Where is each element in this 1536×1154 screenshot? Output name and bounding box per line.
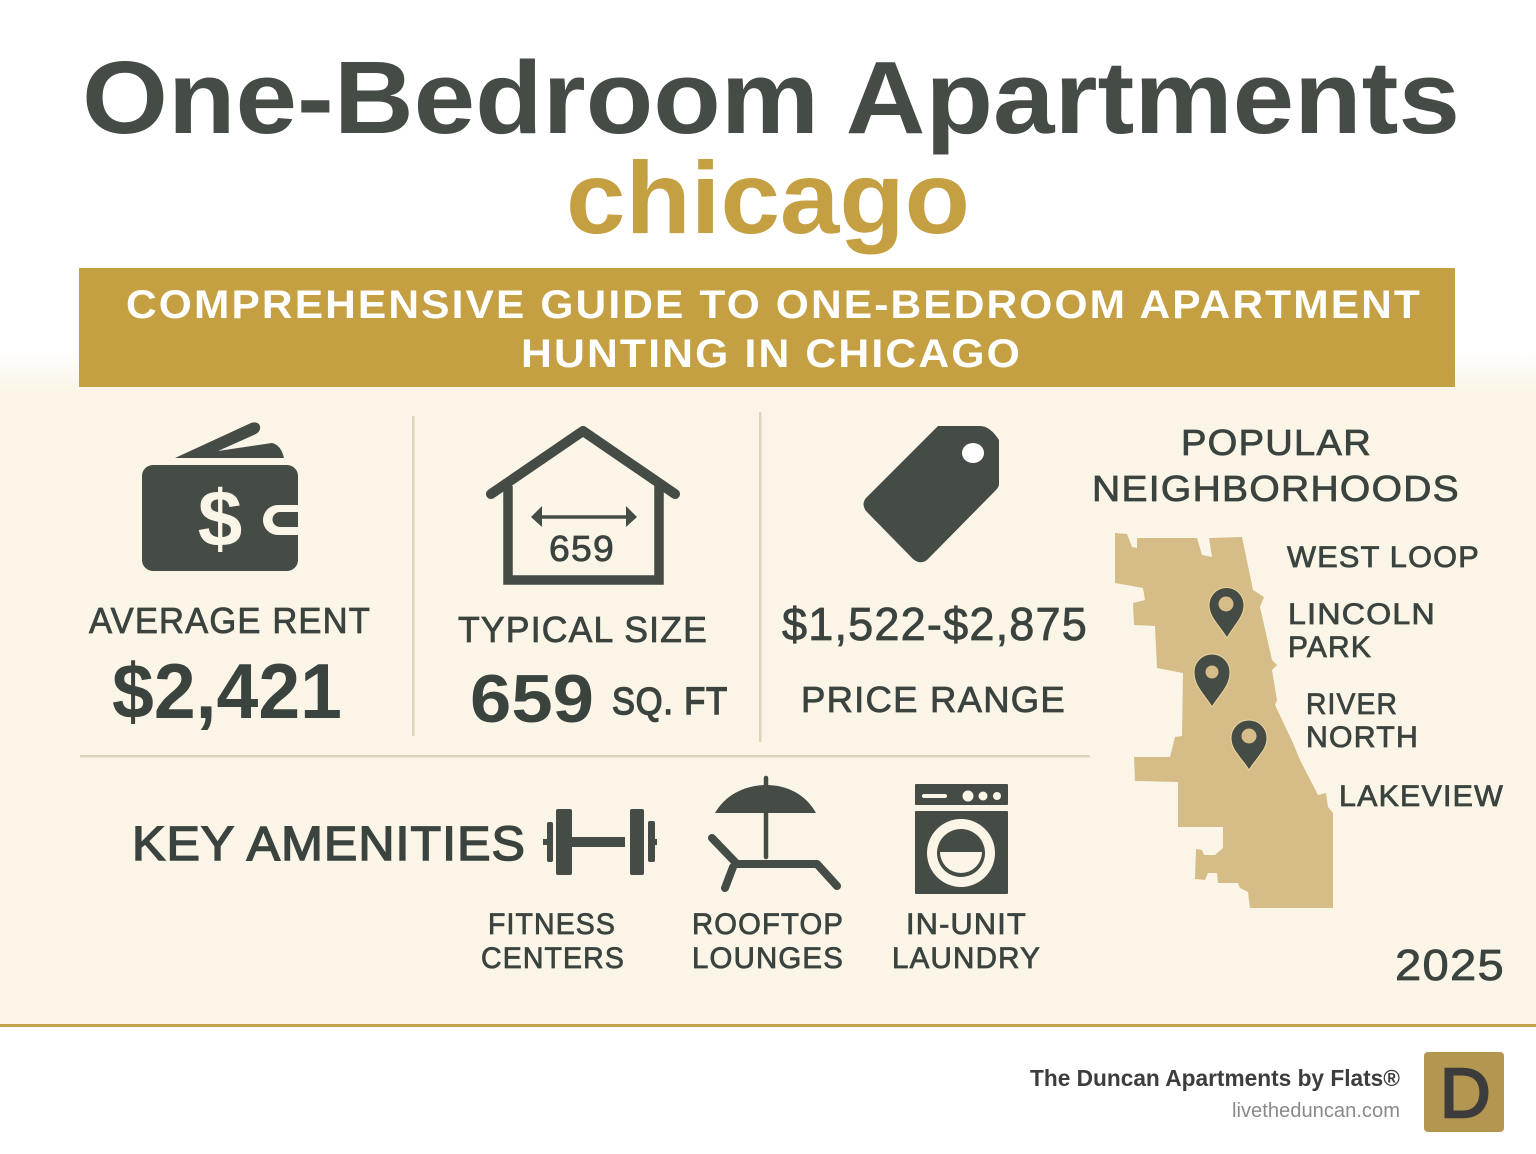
value: price range: $1,522-$2,875 xyxy=(782,598,1088,650)
value: 659: 659 xyxy=(470,661,594,737)
panel: typical size xyxy=(458,431,728,737)
banner text xyxy=(126,283,1422,376)
footer: brand text xyxy=(1030,1065,1400,1122)
icon: house with dimension xyxy=(491,431,675,580)
label: rooftop lounges: LOUNGES xyxy=(692,942,844,975)
label: rooftop lounges: ROOFTOP xyxy=(692,908,844,941)
label: lincoln park xyxy=(1288,598,1436,664)
map: chicago xyxy=(1115,533,1333,908)
panel: key amenities xyxy=(132,778,1041,975)
label: fitness centers: CENTERS xyxy=(481,942,625,975)
icon: map pin 3 xyxy=(1231,720,1267,770)
banner text: COMPREHENSIVE GUIDE TO ONE-BEDROOM APARTMENT xyxy=(126,283,1422,327)
footer: logo xyxy=(1424,1052,1504,1132)
year: 2025 xyxy=(1395,941,1505,990)
label: fitness centers xyxy=(481,908,625,975)
icon: dumbbell xyxy=(543,809,657,875)
footer: brand text: The Duncan Apartments by Flats® xyxy=(1030,1065,1400,1091)
label: in-unit laundry: IN-UNIT xyxy=(906,908,1027,941)
label: fitness centers: FITNESS xyxy=(488,908,616,941)
label: typical size: TYPICAL SIZE xyxy=(458,609,708,650)
value: average rent: $2,421 xyxy=(112,647,342,735)
panel: popular neighborhoods xyxy=(1092,422,1504,908)
heading: popular neighborhoods xyxy=(1092,422,1460,509)
heading: popular neighborhoods: NEIGHBORHOODS xyxy=(1092,468,1460,509)
icon: map pin 2 xyxy=(1194,654,1230,707)
icon: lounger with umbrella xyxy=(712,778,837,888)
label: in-unit laundry: LAUNDRY xyxy=(892,942,1041,975)
unit: square feet: SQ. FT xyxy=(612,681,728,723)
icon: wallet: $ xyxy=(198,474,242,563)
heading: popular neighborhoods: POPULAR xyxy=(1181,422,1372,463)
label: price range: PRICE RANGE xyxy=(801,679,1066,720)
heading: key amenities: KEY AMENITIES xyxy=(132,818,526,871)
panel: average rent xyxy=(89,422,371,735)
gold footer rule xyxy=(0,1024,1536,1027)
title city: chicago xyxy=(566,141,970,255)
label: lakeview: LAKEVIEW xyxy=(1339,780,1504,813)
label: lincoln park: LINCOLN xyxy=(1288,598,1436,631)
label: lincoln park: PARK xyxy=(1288,631,1372,664)
label: river north: NORTH xyxy=(1306,721,1419,754)
label: river north: RIVER xyxy=(1306,688,1398,721)
cream content background xyxy=(0,388,1536,1025)
label: west loop: WEST LOOP xyxy=(1287,541,1480,574)
label: in-unit laundry xyxy=(892,908,1041,975)
icon: house with dimension: 659 xyxy=(549,528,615,569)
banner text: HUNTING IN CHICAGO xyxy=(521,332,1022,376)
footer: brand text: livetheduncan.com xyxy=(1232,1100,1400,1122)
banner xyxy=(79,268,1455,387)
title xyxy=(82,40,1460,255)
title: One-Bedroom Apartments xyxy=(82,40,1460,155)
footer: logo: D xyxy=(1440,1054,1491,1132)
icon: map pin 1 xyxy=(1209,588,1244,638)
icon: washing machine xyxy=(915,784,1008,894)
icon: price tag xyxy=(864,426,999,562)
icon: wallet xyxy=(142,422,298,571)
panel: price range xyxy=(782,426,1088,720)
label: river north xyxy=(1306,688,1419,754)
label: rooftop lounges xyxy=(692,908,844,975)
label: average rent: AVERAGE RENT xyxy=(89,600,371,641)
